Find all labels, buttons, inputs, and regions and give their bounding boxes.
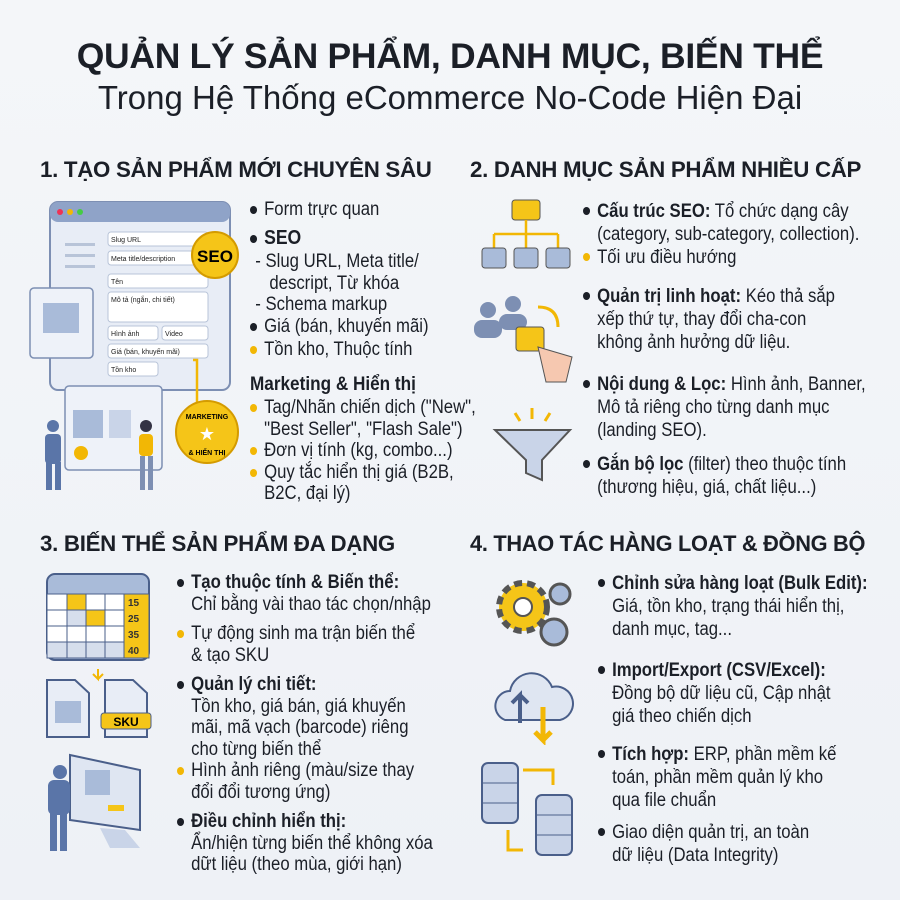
illustration: product form: Tên <box>111 279 123 286</box>
text: section 2: (thương hiệu, giá, chất liệu...) <box>597 477 816 498</box>
text: section 4: qua file chuẩn <box>612 790 716 811</box>
text: section 2: (category, sub-category, collection). <box>597 224 859 245</box>
text: section 1: descript, Từ khóa <box>269 272 399 294</box>
text: section 1: "Best Seller", "Flash Sale") <box>264 418 463 440</box>
icon: files with SKU <box>46 669 152 738</box>
illustration: product form: Slug URL <box>111 237 141 244</box>
text: section 1: Tồn kho, Thuộc tính <box>264 339 412 360</box>
text: section 3: cho từng biến thể <box>191 738 321 760</box>
illustration: product form <box>29 201 239 490</box>
icon: databases <box>481 762 573 856</box>
text: section 3: Quản lý chi tiết: <box>191 674 317 695</box>
text: section 2: Tối ưu điều hướng <box>597 247 736 268</box>
text: section 4: toán, phần mềm quản lý kho <box>612 767 823 788</box>
icon: category tree <box>482 200 570 268</box>
text: section 2: Gắn bộ lọc (filter) theo thuộc tính <box>597 454 846 475</box>
illustration: product form: SEO <box>197 247 233 266</box>
illustration: product form: & HIỂN THỊ <box>189 448 226 457</box>
text: section 3: Hình ảnh riêng (màu/size thay <box>191 760 414 781</box>
icon: drag and drop <box>474 296 573 382</box>
title <box>77 36 823 116</box>
text: section 3: mãi, mã vạch (barcode) riêng <box>191 717 409 738</box>
text: section 2: không ảnh hưởng dữ liệu. <box>597 332 790 353</box>
illustration: product form: Video <box>165 331 183 338</box>
icon: funnel <box>492 408 572 482</box>
text: section 3: dữt liệu (theo mùa, giới hạn) <box>191 854 402 875</box>
icon: variant matrix: 35 <box>128 630 140 641</box>
text: section 1 <box>250 199 476 504</box>
text: section 2: Nội dung & Lọc: Hình ảnh, Banner, <box>597 374 866 395</box>
text: section 3: đổi đổi tương ứng) <box>191 782 330 802</box>
text: section 1: Giá (bán, khuyến mãi) <box>264 316 429 336</box>
icon: cloud sync <box>494 672 574 745</box>
text: section 2: Quản trị linh hoạt: Kéo thả sắp <box>597 286 835 307</box>
text: section 4: Đồng bộ dữ liệu cũ, Cập nhật <box>612 683 831 704</box>
text: section 1: Marketing & Hiển thị <box>250 372 416 394</box>
icon: gears <box>496 580 572 646</box>
text: section 1: SEO <box>264 226 301 248</box>
icon: variant matrix: 15 <box>128 598 140 609</box>
text: section 3: Tạo thuộc tính & Biến thể: <box>191 572 399 593</box>
text: section 4: danh mục, tag... <box>612 619 732 640</box>
title: QUẢN LÝ SẢN PHẨM, DANH MỤC, BIẾN THỂ <box>77 36 823 76</box>
text: section 4: dữ liệu (Data Integrity) <box>612 845 778 866</box>
icon: variant matrix: 25 <box>128 614 140 625</box>
text: section 2: Mô tả riêng cho từng danh mục <box>597 397 829 418</box>
text: section 3: Tự động sinh ma trận biến thể <box>191 623 415 644</box>
heading: section 3: 3. BIẾN THỂ SẢN PHẨM ĐA DẠNG <box>40 531 395 556</box>
text: section 1: B2C, đại lý) <box>264 483 350 504</box>
illustration: product form: Mô tả (ngắn, chi tiết) <box>111 295 175 304</box>
text: section 4: Giao diện quản trị, an toàn <box>612 822 809 843</box>
text: section 1: Đơn vị tính (kg, combo...) <box>264 440 453 461</box>
heading: section 4: 4. THAO TÁC HÀNG LOẠT & ĐỒNG BỘ <box>470 531 865 556</box>
text: section 3: Tồn kho, giá bán, giá khuyến <box>191 696 406 716</box>
text: section 4 <box>598 573 868 866</box>
text: section 3: Điều chỉnh hiển thị: <box>191 811 346 832</box>
text: section 3: & tạo SKU <box>191 644 269 666</box>
icon: files with SKU: SKU <box>113 715 139 729</box>
text: section 2: Cấu trúc SEO: Tổ chức dạng cây <box>597 201 849 222</box>
heading: section 2: 2. DANH MỤC SẢN PHẨM NHIỀU CẤP <box>470 157 861 182</box>
illustration: product form: MARKETING <box>186 414 229 421</box>
heading: section 1: 1. TẠO SẢN PHẨM MỚI CHUYÊN SÂU <box>40 157 432 182</box>
text: section 1: - Schema markup <box>255 294 387 315</box>
text: section 4: Import/Export (CSV/Excel): <box>612 660 826 681</box>
text: section 4: Giá, tồn kho, trạng thái hiển thị, <box>612 596 844 617</box>
illustration: product form: Tồn kho <box>111 365 136 374</box>
text: section 2: xếp thứ tự, thay đổi cha-con <box>597 309 806 330</box>
text: section 1: Quy tắc hiển thị giá (B2B, <box>264 462 454 482</box>
icon: variant matrix <box>46 573 150 661</box>
text: section 2 <box>583 201 866 498</box>
illustration: product form: Giá (bán, khuyến mãi) <box>111 347 180 356</box>
illustration: product form: Hình ảnh <box>111 331 140 338</box>
text: section 3 <box>177 572 433 875</box>
text: section 1: - Slug URL, Meta title/ <box>255 251 419 272</box>
title: Trong Hệ Thống eCommerce No-Code Hiện Đại <box>98 79 802 116</box>
text: section 1: Tag/Nhãn chiến dịch ("New", <box>264 397 476 418</box>
text: section 4: Chỉnh sửa hàng loạt (Bulk Edit): <box>612 573 868 594</box>
text: section 3: Ẩn/hiện từng biến thể không xóa <box>191 832 433 854</box>
text: section 4: giá theo chiến dịch <box>612 706 752 727</box>
text: section 3: Chỉ bằng vài thao tác chọn/nhập <box>191 594 431 614</box>
icon: variant matrix: 40 <box>128 646 140 657</box>
text: section 4: Tích hợp: ERP, phần mềm kế <box>612 744 836 765</box>
illustration: person at monitor <box>48 754 141 851</box>
text: section 1: Form trực quan <box>264 199 379 220</box>
text: section 2: (landing SEO). <box>597 420 707 441</box>
illustration: product form: ★ <box>199 424 215 444</box>
illustration: product form: Meta title/description <box>111 256 175 263</box>
